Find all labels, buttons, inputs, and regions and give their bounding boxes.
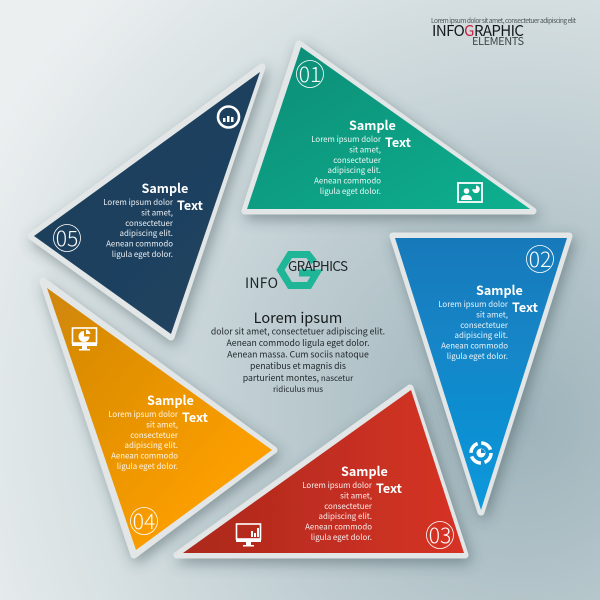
text: sample 03: Sample — [341, 461, 388, 480]
text: sample 01 — [311, 115, 412, 197]
text: sample 02 — [438, 280, 539, 362]
triangle 04 — [43, 281, 274, 555]
logo text: GRAPHICS — [288, 255, 348, 275]
number 02: 02 — [529, 244, 551, 274]
text: sample 02: consectetuer — [460, 320, 509, 331]
text: sample 04: sit amet, — [146, 419, 178, 430]
text: sample 04: adipiscing elit. — [124, 440, 178, 451]
center text block: Aenean commodo ligula eget dolor. — [226, 336, 370, 349]
text: sample 04 — [108, 390, 209, 472]
text: sample 02: Lorem ipsum dolor — [438, 299, 509, 310]
icon: monitor with bars — [236, 524, 261, 546]
icon: cycle arrows — [471, 443, 491, 463]
text: sample 01: adipiscing elit. — [328, 165, 381, 176]
text: sample 02: Text — [512, 297, 539, 316]
text: sample 03: ligula eget dolor. — [311, 532, 372, 543]
triangle 05 — [31, 67, 262, 337]
text: sample 04: Sample — [147, 390, 194, 409]
text: sample 02: Aenean commodo — [441, 341, 508, 352]
icon: target chart — [218, 106, 239, 128]
text: sample 05: Lorem ipsum dolor — [103, 197, 174, 208]
text: sample 05: sit amet, — [141, 207, 173, 218]
center text block: dolor sit amet, consectetuer adipiscing elit. — [211, 324, 385, 338]
header: infographic elements: INFOGRAPHIC — [432, 20, 524, 41]
text: sample 01: Sample — [349, 115, 396, 134]
text: sample 04: consectetuer — [130, 430, 179, 441]
text: sample 04: ligula eget dolor. — [117, 461, 178, 472]
header: infographic elements: Lorem ipsum dolor sit amet, consectetuer adipiscing elit — [431, 15, 576, 25]
text: sample 03: adipiscing elit. — [318, 511, 372, 522]
text: sample 02: sit amet, — [476, 309, 508, 320]
panel 02 — [393, 236, 569, 512]
logo text — [245, 255, 348, 293]
center text block: ridiculus mus — [273, 384, 323, 395]
triangle 02 — [393, 236, 569, 512]
text: sample 02: Sample — [476, 280, 523, 299]
text: sample 04: Aenean commodo — [111, 451, 178, 462]
text: sample 01: Text — [385, 132, 412, 151]
icon: monitor with pie — [72, 328, 97, 350]
number 05: 05 — [56, 223, 78, 253]
header: infographic elements — [431, 15, 576, 49]
text: sample 03: sit amet, — [340, 490, 372, 501]
center logo: info graphics — [245, 254, 348, 293]
text: sample 05: Aenean commodo — [106, 239, 173, 250]
text: sample 01: Aenean commodo — [314, 176, 381, 187]
text: sample 01: consectetuer — [333, 155, 382, 166]
text: sample 05: adipiscing elit. — [120, 228, 173, 239]
text: sample 05: consectetuer — [125, 218, 174, 229]
panel 03 — [177, 388, 465, 555]
text: sample 03: Aenean commodo — [305, 522, 372, 533]
triangle 03 — [177, 388, 465, 555]
center text block: penatibus et magnis dis — [250, 359, 346, 372]
icon: presenter board — [458, 183, 482, 202]
center text block: parturient montes, nascetur — [243, 371, 354, 384]
number 01: 01 — [299, 59, 321, 89]
header: infographic elements: ELEMENTS — [472, 33, 524, 49]
triangle 01 — [245, 44, 533, 211]
center text block: Aenean massa. Cum sociis natoque — [227, 348, 369, 360]
panel 04 — [43, 281, 274, 555]
text: sample 02: adipiscing elit. — [454, 330, 508, 341]
text: sample 03: consectetuer — [324, 501, 373, 512]
text: sample 04: Text — [182, 407, 209, 426]
text: sample 01: ligula eget dolor. — [320, 186, 381, 197]
panel 05 — [31, 67, 262, 337]
number 04: 04 — [133, 506, 155, 536]
text: sample 05: ligula eget dolor. — [112, 249, 173, 260]
text: sample 01: sit amet, — [349, 144, 381, 155]
center text block: Lorem ipsum — [254, 307, 342, 328]
text: sample 03: Text — [376, 478, 403, 497]
text: sample 03 — [302, 461, 403, 543]
center text block — [211, 307, 385, 395]
text: sample 04: Lorem ipsum dolor — [108, 409, 179, 420]
logo: hexagon G — [280, 254, 316, 286]
logo text: INFO — [245, 273, 278, 293]
text: sample 02: ligula eget dolor. — [447, 351, 508, 362]
number 03: 03 — [429, 520, 451, 550]
text: sample 05 — [103, 178, 204, 260]
text: sample 05: Sample — [142, 178, 188, 197]
text: sample 03: Lorem ipsum dolor — [302, 480, 373, 491]
text: sample 01: Lorem ipsum dolor — [311, 134, 382, 145]
text: sample 05: Text — [177, 195, 204, 214]
panel 01 — [245, 44, 533, 211]
